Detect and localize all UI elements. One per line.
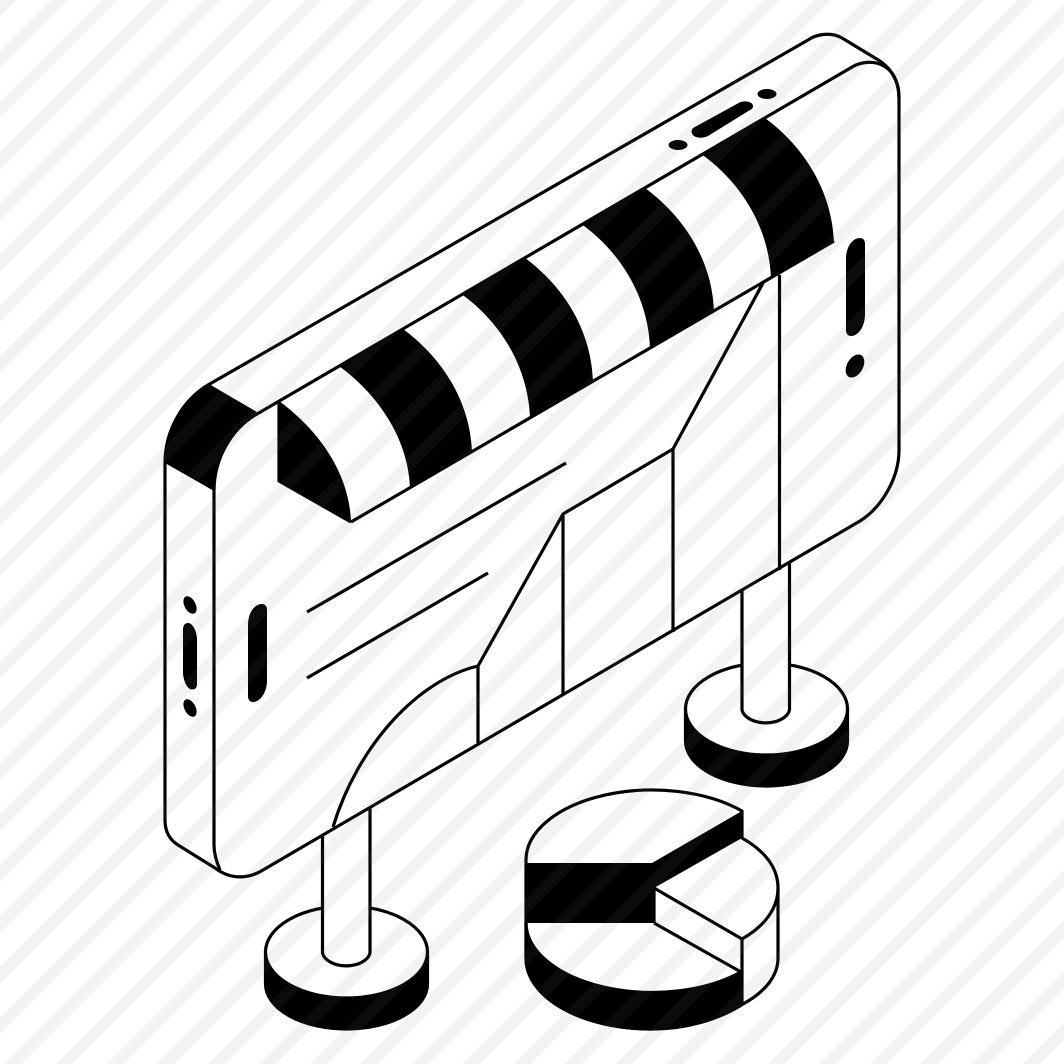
area chart: [333, 275, 780, 827]
awning base: [279, 118, 834, 522]
stripe 2: [339, 329, 472, 488]
right base disc: [686, 663, 848, 786]
black corner band: [165, 384, 257, 491]
right front dot: [842, 351, 868, 381]
side and top outline: [165, 34, 899, 877]
left stand: [266, 790, 428, 1029]
stripe wedge: [279, 401, 351, 522]
awning stripes: [279, 118, 834, 522]
right stand: [686, 540, 848, 786]
black rim bottom: [526, 923, 741, 1029]
stripe 3: [462, 258, 593, 418]
text lines: [307, 463, 566, 678]
awning edge lines: [279, 241, 834, 522]
pie body silhouette: [526, 790, 778, 1029]
right front pill: [846, 238, 865, 336]
billboard body: [165, 34, 899, 877]
pie chart: [525, 790, 778, 1029]
left front pill: [248, 604, 267, 702]
left edge buttons: [181, 594, 199, 719]
left base disc: [266, 906, 428, 1029]
top edge speaker and dots: [668, 89, 776, 150]
front face outline: [214, 62, 899, 870]
black band top: [525, 811, 742, 923]
right slice edges: [654, 888, 778, 1004]
stripe 5: [702, 118, 834, 278]
stripe 4: [582, 188, 714, 348]
left post: [322, 790, 370, 966]
right post: [742, 540, 790, 723]
